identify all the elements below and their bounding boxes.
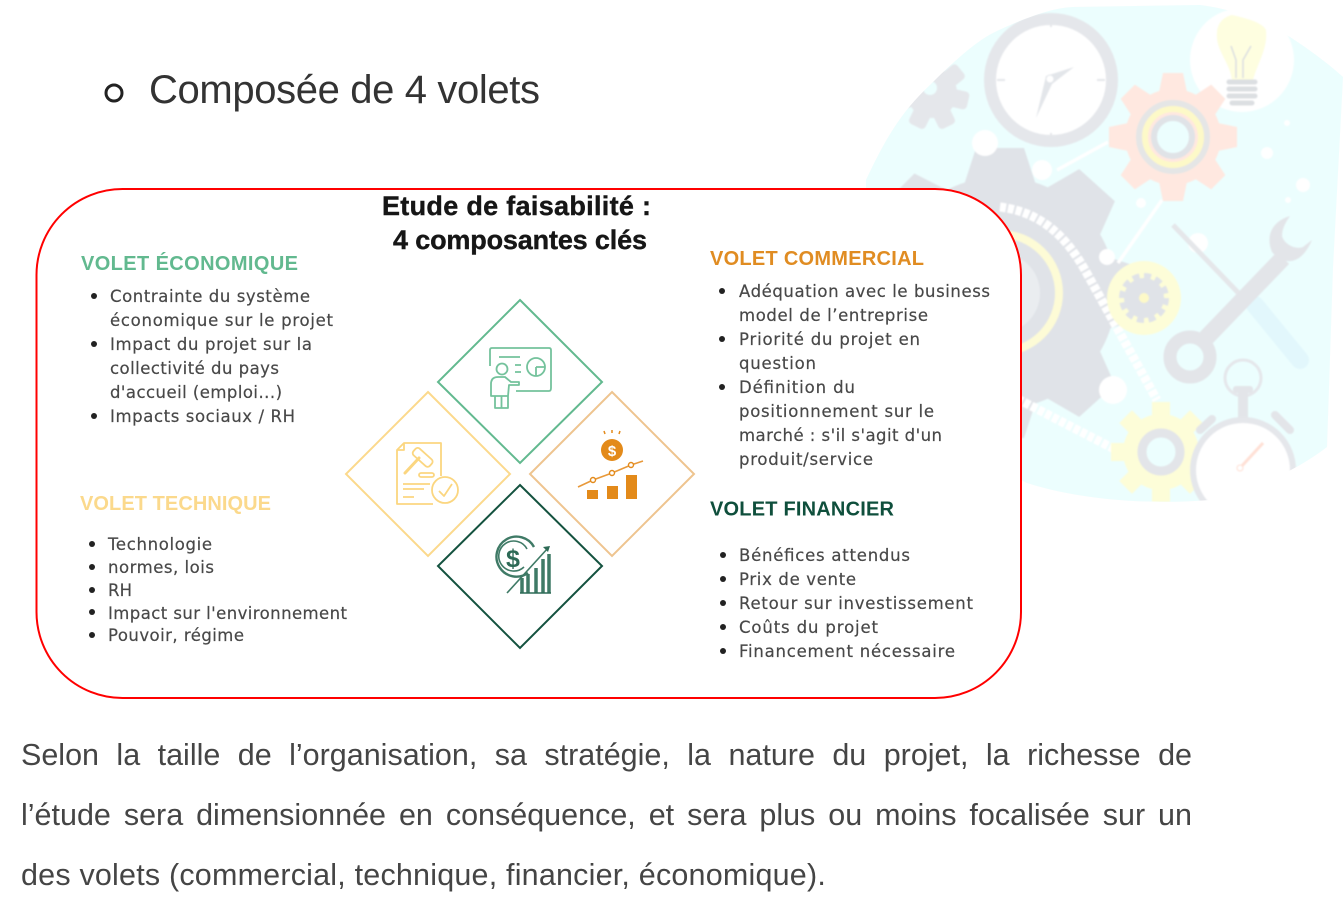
section: volet commercial: marché : s'il s'agit d'un: [739, 426, 942, 445]
section: volet commercial: VOLET COMMERCIAL: [710, 248, 924, 270]
icon: legal document with gavel: [397, 443, 458, 504]
icon: wrench: [1170, 216, 1312, 377]
paragraph: l’étude sera dimensionnée en conséquence, et sera plus ou moins focalisée sur un: [21, 798, 1192, 832]
icon: presenter at board: [490, 348, 551, 408]
heading: feasibility study: [382, 191, 651, 255]
section: volet technique: VOLET TECHNIQUE: [80, 493, 271, 515]
bullet: [106, 85, 122, 101]
section: volet technique: Impact sur l'environnement: [108, 604, 348, 623]
heading: feasibility study: 4 composantes clés: [393, 225, 647, 255]
section: volet financier: Coûts du projet: [739, 618, 879, 637]
section: volet économique: économique sur le projet: [110, 311, 334, 330]
section: volet technique: [80, 493, 348, 645]
paragraph: Selon la taille de l’organisation, sa stratégie, la nature du projet, la richesse de: [21, 738, 1192, 772]
section: volet commercial: produit/service: [739, 450, 873, 469]
icon: dollar coin and growth chart: $: [506, 545, 520, 573]
icon: clock: [984, 13, 1118, 147]
icon: orange gear: [1109, 73, 1237, 201]
section: volet commercial: positionnement sur le: [739, 402, 934, 421]
section: volet économique: Contrainte du système: [110, 287, 310, 306]
section: volet économique: Impact du projet sur la: [110, 335, 312, 354]
icon: small grey gear: [909, 64, 970, 129]
section: volet financier: Financement nécessaire: [739, 642, 955, 661]
section: volet technique: Technologie: [107, 535, 212, 554]
icon: coin and rising bars: [578, 430, 643, 499]
icon: light bulb: [1190, 8, 1294, 112]
section: volet commercial: model de l’entreprise: [739, 306, 928, 325]
heading: feasibility study: Etude de faisabilité :: [382, 191, 651, 221]
white dots: [972, 120, 1310, 404]
section: volet technique: normes, lois: [108, 558, 214, 577]
panel: four components: [36, 189, 1021, 698]
background illustration: gears and tools: [855, 0, 1344, 520]
section: volet économique: [81, 252, 334, 426]
icon: dollar coin and growth chart: [496, 537, 551, 593]
section: volet économique: VOLET ÉCONOMIQUE: [81, 252, 298, 275]
icon: yellow gear bottom: [1111, 402, 1211, 502]
icon: white connector lines: [1057, 142, 1162, 263]
diamond: commercial, orange: [530, 392, 694, 556]
diamond: economic, green: [438, 300, 602, 463]
paragraph: des volets (commercial, technique, financier, économique).: [21, 858, 826, 892]
icon: coin and rising bars: $: [608, 443, 617, 460]
section: volet financier: VOLET FINANCIER: [710, 498, 895, 520]
diamond: financial, dark green: [438, 485, 602, 648]
section: volet financier: Prix de vente: [739, 570, 856, 589]
section: volet commercial: Définition du: [739, 378, 855, 397]
section: volet commercial: question: [739, 354, 816, 373]
section: volet financier: Retour sur investissement: [739, 594, 974, 613]
icon: screwdriver: [1173, 225, 1300, 360]
section: volet financier: [710, 498, 974, 661]
icon: stopwatch: [1193, 360, 1293, 520]
title: Composée de 4 volets: [149, 68, 540, 112]
section: volet économique: Impacts sociaux / RH: [110, 407, 295, 426]
section: volet commercial: [710, 248, 990, 469]
section: volet économique: collectivité du pays: [110, 359, 279, 378]
section: volet commercial: Priorité du projet en: [739, 330, 920, 349]
section: volet commercial: Adéquation avec le business: [739, 282, 990, 301]
icon: yellow gear small: [1107, 261, 1181, 335]
diamond: technical, yellow: [346, 392, 510, 556]
section: volet technique: RH: [108, 581, 132, 600]
icon: large grey gear with pulley: [900, 148, 1160, 452]
section: volet financier: Bénéfices attendus: [739, 546, 910, 565]
paragraph: [21, 738, 1192, 892]
section: volet économique: d'accueil (emploi...): [110, 383, 282, 402]
section: volet technique: Pouvoir, régime: [108, 626, 244, 645]
